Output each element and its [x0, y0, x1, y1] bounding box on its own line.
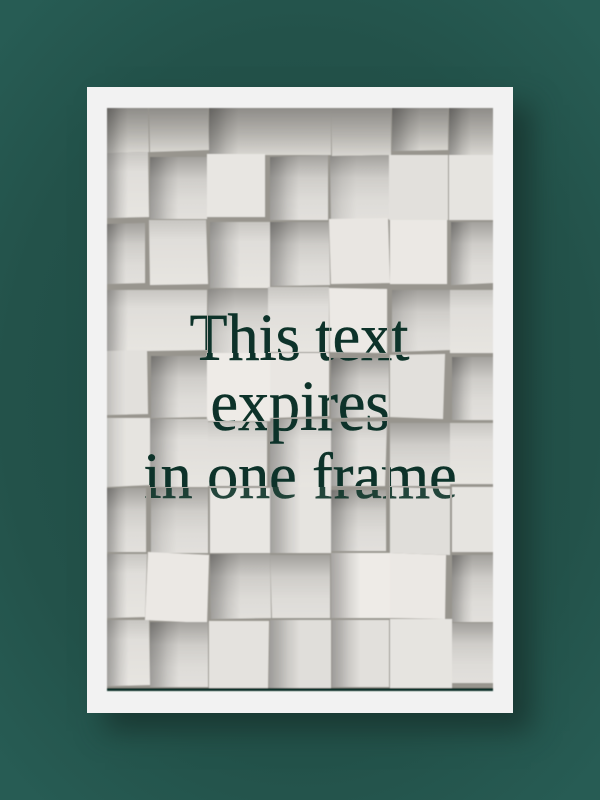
tile backing — [107, 108, 493, 691]
tile mosaic — [107, 108, 493, 691]
tile row 6 — [107, 418, 493, 487]
title slice: upper tiles: This text — [190, 303, 408, 371]
tile row 5 — [107, 350, 493, 421]
tile row 9 — [107, 619, 493, 688]
title slice: second tile row: This text — [191, 306, 409, 374]
title slice: third tile row: expires — [210, 376, 390, 444]
title slice: second tile row: expires — [210, 370, 390, 438]
title slice: third tile row: in one frame — [143, 442, 457, 510]
tile row 1 — [107, 108, 493, 156]
poster frame — [87, 87, 513, 713]
dark strip at artwork base — [107, 688, 493, 691]
tile row 2 — [107, 152, 493, 220]
title slice: second tile row — [200, 353, 410, 421]
paper tile artwork — [106, 107, 494, 692]
title slice: fourth tile row: in one frame — [144, 444, 458, 512]
tile row 4 — [107, 287, 493, 353]
tile row 8 — [107, 552, 493, 623]
title text — [145, 313, 455, 499]
title slice: third tile row — [145, 419, 455, 487]
tile row 3 — [107, 218, 493, 288]
tile row 7 — [107, 487, 493, 555]
